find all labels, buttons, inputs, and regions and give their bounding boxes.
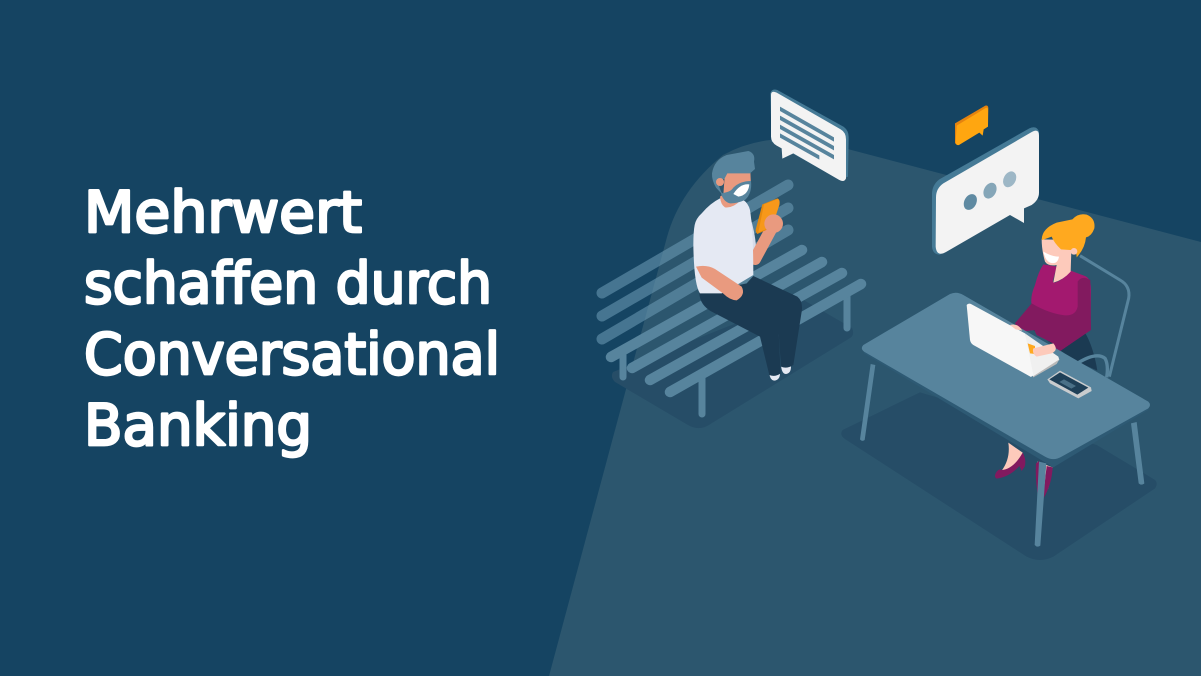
face and neck bbox=[1042, 239, 1072, 283]
white speech bubble bbox=[932, 127, 1039, 255]
title: Banking bbox=[84, 393, 312, 459]
blouse bbox=[1015, 264, 1091, 353]
bench seat slats bbox=[611, 250, 861, 392]
smartphone bbox=[1047, 371, 1092, 398]
message lines bbox=[780, 107, 834, 160]
smile bbox=[733, 184, 749, 197]
typing dots bbox=[961, 192, 980, 212]
hand bbox=[764, 214, 783, 233]
beard bbox=[721, 181, 751, 203]
hair bbox=[1042, 214, 1095, 257]
bench legs bbox=[623, 295, 847, 414]
light cone bbox=[549, 140, 1201, 676]
shoes bbox=[769, 365, 791, 381]
desk underside bbox=[863, 347, 1148, 467]
phone bbox=[756, 198, 779, 234]
desk shadow bbox=[841, 392, 1157, 560]
chair arm bbox=[1078, 356, 1107, 377]
man upper body bbox=[693, 151, 783, 300]
title: Mehrwert bbox=[84, 180, 362, 246]
arm holding phone bbox=[755, 225, 773, 259]
desk top bbox=[862, 293, 1150, 459]
ear bbox=[1071, 248, 1077, 255]
title bbox=[84, 180, 500, 459]
orange speech bubble bbox=[955, 106, 988, 145]
man legs bbox=[699, 276, 802, 381]
woman legs and shoes bbox=[995, 443, 1053, 498]
skirt bbox=[1033, 330, 1097, 371]
desk legs bbox=[860, 364, 1144, 547]
chair back bbox=[1080, 256, 1129, 377]
woman upper body bbox=[1015, 214, 1095, 353]
title: schaffen durch bbox=[84, 251, 492, 317]
torso bbox=[693, 198, 753, 293]
title: Conversational bbox=[84, 322, 500, 388]
hands bbox=[1010, 324, 1056, 357]
bench shadow bbox=[612, 298, 853, 428]
speech bubble: man bbox=[770, 89, 849, 181]
illustration: woman at desk bbox=[841, 106, 1157, 560]
smile bbox=[1043, 252, 1059, 263]
trousers bbox=[699, 276, 802, 376]
hair bbox=[712, 151, 755, 196]
ear bbox=[716, 178, 724, 186]
far sleeve bbox=[747, 213, 756, 253]
bench back slats bbox=[602, 185, 788, 339]
illustration: man on bench bbox=[602, 89, 861, 428]
blouse shading bbox=[1015, 278, 1091, 353]
forearm on lap bbox=[696, 266, 743, 300]
laptop bbox=[967, 304, 1059, 377]
neck bbox=[720, 188, 741, 207]
face bbox=[723, 171, 751, 202]
